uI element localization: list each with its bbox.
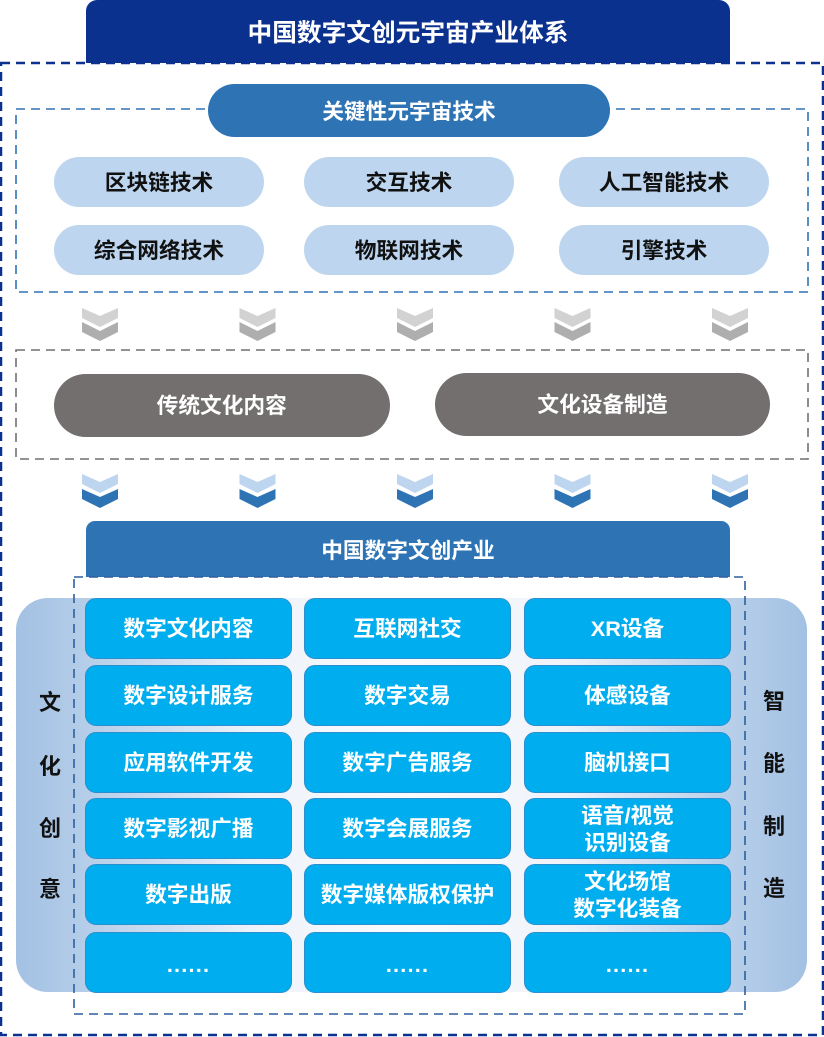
card (85, 598, 292, 658)
card (85, 798, 292, 858)
card: 数字媒体版权保护 (321, 882, 494, 907)
card: 数字设计服务 (123, 683, 254, 708)
card: 体感设备 (584, 683, 671, 708)
card (304, 798, 511, 858)
card (304, 598, 511, 658)
card: XR设备 (591, 616, 664, 641)
section pill: key technologies (208, 84, 610, 137)
side panel background (16, 598, 807, 992)
technology pill: 人工智能技术 (599, 170, 729, 195)
card (304, 665, 511, 726)
card (524, 798, 731, 858)
technology pill: 区块链技术 (105, 170, 213, 195)
card: 脑机接口 (584, 750, 671, 775)
card (304, 732, 511, 792)
card: 数字会展服务 (342, 816, 473, 841)
section pill: key technologies: 关键性元宇宙技术 (322, 98, 496, 124)
technology pill (304, 225, 514, 274)
card (85, 665, 292, 726)
card: 数字化装备 (573, 896, 682, 921)
right label: 智能制造 (763, 689, 785, 901)
title banner: 中国数字文创元宇宙产业体系 (248, 20, 568, 46)
left label: 文化创意: 文 (39, 690, 61, 715)
card (304, 864, 511, 924)
left label: 文化创意: 创 (39, 816, 61, 841)
industry banner (86, 521, 730, 577)
card (524, 732, 731, 792)
title banner (86, 0, 730, 63)
traditional culture pill (54, 374, 390, 436)
card (524, 864, 731, 924)
right label: 智能制造: 造 (763, 876, 785, 901)
culture equipment pill (435, 373, 770, 436)
card: ...... (606, 952, 649, 977)
card (85, 732, 292, 792)
card (524, 665, 731, 726)
left label: 文化创意 (39, 690, 61, 902)
card: ...... (386, 952, 429, 977)
card: 文化场馆 (584, 869, 671, 894)
technology pill: 交互技术 (366, 170, 452, 195)
technology pill (54, 157, 264, 206)
technology pill (304, 157, 514, 206)
card: 数字广告服务 (342, 750, 473, 775)
right label: 智能制造: 制 (763, 814, 785, 839)
card (524, 598, 731, 658)
technology pill (54, 225, 264, 274)
technology pill (559, 225, 769, 274)
culture equipment pill: 文化设备制造 (537, 392, 668, 417)
right label: 智能制造: 智 (763, 689, 785, 714)
card: 数字交易 (364, 683, 451, 708)
card: 识别设备 (584, 830, 671, 855)
technology pill: 引擎技术 (621, 238, 707, 263)
industry banner: 中国数字文创产业 (321, 538, 495, 562)
card: 数字出版 (145, 882, 232, 907)
traditional culture pill: 传统文化内容 (157, 392, 287, 418)
card (524, 932, 731, 992)
left label: 文化创意: 化 (39, 754, 61, 779)
left label: 文化创意: 意 (39, 877, 61, 902)
card: 互联网社交 (353, 616, 462, 641)
card: 语音/视觉 (581, 803, 674, 828)
card (85, 864, 292, 924)
card: 应用软件开发 (123, 750, 254, 775)
technology pill: 物联网技术 (355, 238, 463, 263)
technology pill (559, 157, 769, 206)
card: 数字文化内容 (123, 616, 254, 641)
right label: 智能制造: 能 (763, 751, 785, 776)
card (304, 932, 511, 992)
card (85, 932, 292, 992)
technology pill: 综合网络技术 (94, 238, 224, 263)
card: ...... (167, 952, 210, 977)
card: 数字影视广播 (123, 816, 254, 841)
